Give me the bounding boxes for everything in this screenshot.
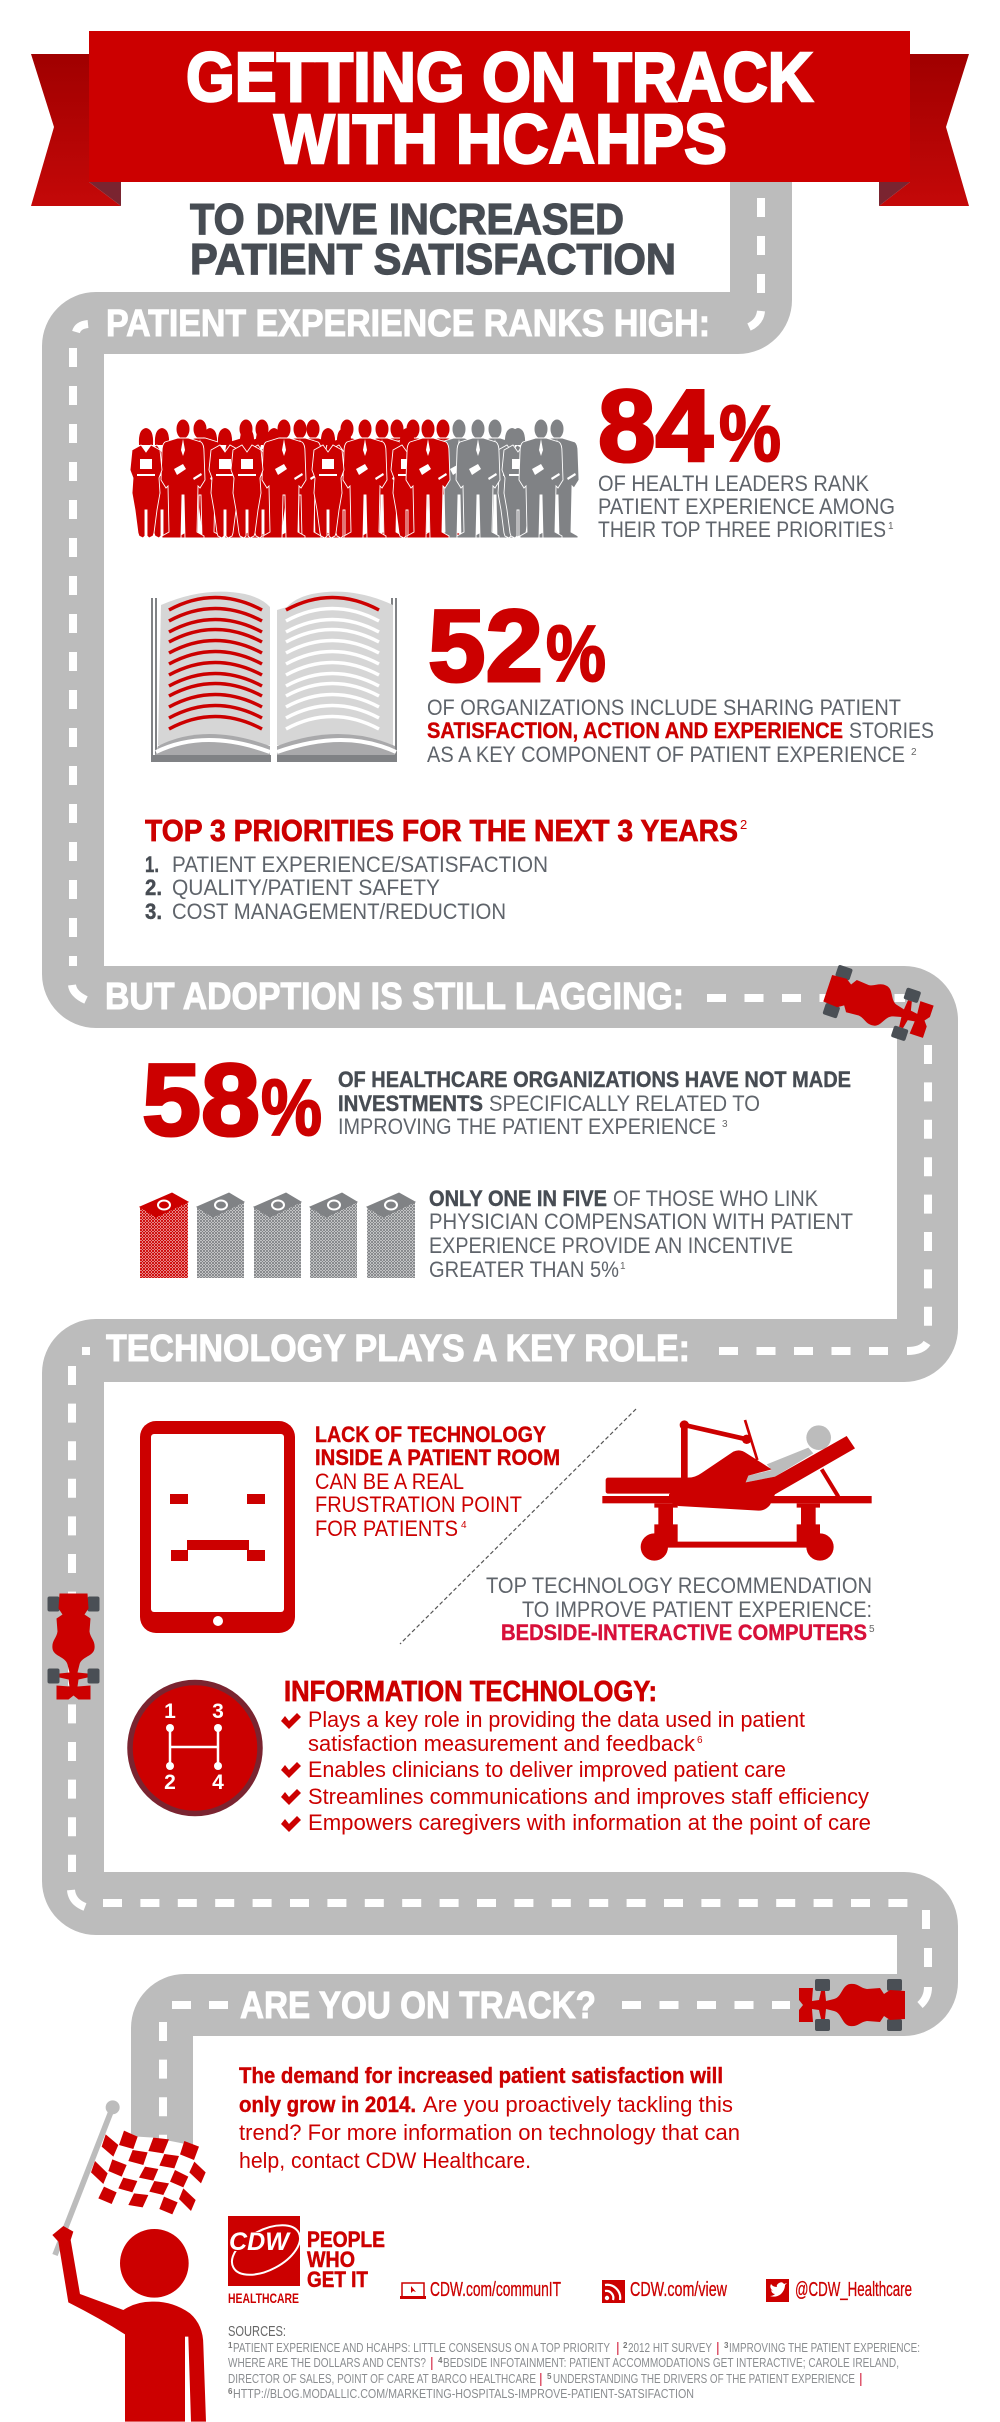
- link: view: [602, 2279, 727, 2303]
- information technology list: Enables clinicians to deliver improved patient care: [308, 1757, 786, 1782]
- call to action text: Are you proactively tackling this: [423, 2092, 733, 2117]
- stat: 52 percent: 2: [911, 747, 917, 758]
- sources: 3: [724, 2341, 729, 2350]
- title banner: WITH HCAHPS: [274, 100, 727, 178]
- stat: 52 percent: OF ORGANIZATIONS INCLUDE SHARING PATIENT: [427, 695, 901, 720]
- icon: patient in hospital bed: [602, 1420, 872, 1561]
- stat: 58 percent: 3: [722, 1119, 728, 1130]
- text: one in five: [429, 1186, 853, 1282]
- top 3 priorities list: 2.: [145, 875, 162, 900]
- text: lack of technology: INSIDE A PATIENT ROOM: [315, 1445, 560, 1470]
- heading: but adoption is still lagging: BUT ADOPTION IS STILL LAGGING:: [105, 976, 684, 1018]
- sources: [228, 2323, 920, 2401]
- information technology list: Streamlines communications and improves staff efficiency: [308, 1784, 869, 1809]
- text: one in five: 1: [620, 1261, 626, 1272]
- link: communIT: CDW.com/communIT: [430, 2279, 561, 2301]
- CDW logo: HEALTHCARE: [228, 2290, 299, 2306]
- sources: 6: [228, 2387, 233, 2396]
- text: one in five: GREATER THAN 5%: [429, 1257, 619, 1282]
- icon: person waving checkered flag: [52, 2100, 206, 2422]
- CDW logo: [224, 2215, 385, 2306]
- text: one in five: EXPERIENCE PROVIDE AN INCENTIVE: [429, 1233, 793, 1258]
- icon: money stacks: [140, 1193, 415, 1278]
- text: lack of technology: 4: [461, 1520, 467, 1531]
- call to action text: trend? For more information on technology that can: [239, 2120, 740, 2145]
- sources: 1: [228, 2341, 233, 2350]
- call to action text: The demand for increased patient satisfaction will: [239, 2063, 723, 2088]
- stat: 58 percent: OF HEALTHCARE ORGANIZATIONS HAVE NOT MADE: [338, 1067, 851, 1092]
- top 3 priorities list: COST MANAGEMENT/REDUCTION: [172, 899, 506, 924]
- stat: 84 percent: 1: [888, 521, 894, 532]
- sources: 2012 HIT SURVEY: [628, 2340, 712, 2355]
- text: top technology recommendation: [486, 1573, 875, 1645]
- text: one in five: ONLY ONE IN FIVE: [429, 1186, 607, 1211]
- text: lack of technology: FOR PATIENTS: [315, 1516, 458, 1541]
- text: top technology recommendation: TOP TECHNOLOGY RECOMMENDATION: [486, 1573, 872, 1598]
- sources: DIRECTOR OF SALES, POINT OF CARE AT BARCO HEALTHCARE: [228, 2371, 536, 2386]
- top 3 priorities list: [145, 813, 747, 924]
- sources: |: [716, 2339, 720, 2355]
- CDW logo: PEOPLE: [307, 2227, 385, 2252]
- road track: [42, 182, 958, 2145]
- text: lack of technology: CAN BE A REAL: [315, 1469, 464, 1494]
- information technology list: [281, 1676, 871, 1835]
- text: top technology recommendation: 5: [869, 1624, 875, 1635]
- stat: 52 percent: AS A KEY COMPONENT OF PATIENT EXPERIENCE: [427, 742, 905, 767]
- stat: 84 percent: THEIR TOP THREE PRIORITIES: [598, 517, 886, 542]
- sources: 2: [623, 2341, 628, 2350]
- call to action text: [239, 2063, 740, 2173]
- text: lack of technology: FRUSTRATION POINT: [315, 1492, 522, 1517]
- icon: race car on bend: [820, 964, 936, 1046]
- call to action text: only grow in 2014.: [239, 2092, 416, 2117]
- icon: gear shift knob: 1: [164, 1700, 176, 1723]
- text: one in five: OF THOSE WHO LINK: [613, 1186, 818, 1211]
- stat: 58 percent: 58: [142, 1043, 260, 1157]
- icon: sad tablet: [140, 1421, 295, 1633]
- stat: 58 percent: IMPROVING THE PATIENT EXPERIENCE: [338, 1114, 716, 1139]
- subtitle: TO DRIVE INCREASED: [190, 195, 624, 244]
- sources: |: [539, 2370, 543, 2386]
- text: top technology recommendation: TO IMPROVE PATIENT EXPERIENCE:: [522, 1597, 872, 1622]
- stat: 52 percent: 52: [428, 589, 543, 703]
- information technology list: INFORMATION TECHNOLOGY:: [284, 1676, 657, 1708]
- icon: gear shift knob: [130, 1682, 260, 1814]
- text: top technology recommendation: BEDSIDE-INTERACTIVE COMPUTERS: [501, 1620, 867, 1645]
- heading: technology plays a key role: TECHNOLOGY PLAYS A KEY ROLE:: [106, 1328, 690, 1370]
- title banner: GETTING ON TRACK: [186, 38, 813, 116]
- top 3 priorities list: 1.: [145, 852, 159, 877]
- top 3 priorities list: 3.: [145, 899, 162, 924]
- information technology list: Empowers caregivers with information at the point of care: [308, 1810, 871, 1835]
- stat: 84 percent: PATIENT EXPERIENCE AMONG: [598, 494, 895, 519]
- call to action text: help, contact CDW Healthcare.: [239, 2148, 531, 2173]
- top 3 priorities list: QUALITY/PATIENT SAFETY: [172, 875, 440, 900]
- heading: patient experience ranks high: PATIENT EXPERIENCE RANKS HIGH:: [106, 303, 710, 345]
- top 3 priorities list: PATIENT EXPERIENCE/SATISFACTION: [172, 852, 548, 877]
- top 3 priorities list: 2: [740, 817, 747, 832]
- subtitle: PATIENT SATISFACTION: [190, 235, 676, 284]
- sources: PATIENT EXPERIENCE AND HCAHPS: LITTLE CONSENSUS ON A TOP PRIORITY: [233, 2340, 610, 2355]
- stat: 58 percent: %: [261, 1063, 322, 1152]
- stat: 84 percent: OF HEALTH LEADERS RANK: [598, 471, 869, 496]
- sources: |: [859, 2370, 863, 2386]
- stat: 52 percent: [427, 589, 934, 767]
- CDW logo: WHO: [307, 2247, 355, 2272]
- sources: 4: [438, 2356, 443, 2365]
- sources: 5: [547, 2372, 552, 2381]
- stat: 52 percent: STORIES: [849, 718, 934, 743]
- top 3 priorities list: TOP 3 PRIORITIES FOR THE NEXT 3 YEARS: [145, 813, 738, 848]
- stat: 58 percent: INVESTMENTS: [338, 1091, 483, 1116]
- title banner: [31, 31, 969, 206]
- text: lack of technology: [315, 1422, 560, 1541]
- icon: open book: [151, 592, 397, 762]
- sources: WHERE ARE THE DOLLARS AND CENTS?: [228, 2355, 426, 2370]
- information technology list: Plays a key role in providing the data used in patient: [308, 1707, 805, 1732]
- sources: SOURCES:: [228, 2323, 286, 2340]
- icon: gear shift knob: 4: [212, 1771, 224, 1794]
- icon: race car on left straight: [48, 1594, 100, 1700]
- sources: |: [430, 2354, 434, 2370]
- stat: 58 percent: [142, 1043, 851, 1157]
- stat: 84 percent: [598, 369, 895, 542]
- text: lack of technology: LACK OF TECHNOLOGY: [315, 1422, 546, 1447]
- link: view: CDW.com/view: [630, 2279, 727, 2301]
- information technology list: satisfaction measurement and feedback: [308, 1731, 696, 1756]
- icon: race car on bottom straight: [799, 1979, 905, 2031]
- stat: 84 percent: %: [719, 389, 781, 478]
- stat: 84 percent: 84: [598, 369, 713, 483]
- link: twitter: @CDW_Healthcare: [795, 2279, 912, 2301]
- stat: 52 percent: SATISFACTION, ACTION AND EXPERIENCE: [427, 718, 843, 743]
- icon: gear shift knob: 3: [212, 1700, 224, 1723]
- icon: crowd of health leaders: [130, 420, 579, 538]
- sources: HTTP://BLOG.MODALLIC.COM/MARKETING-HOSPITALS-IMPROVE-PATIENT-SATSIFACTION: [233, 2386, 694, 2401]
- CDW logo: GET IT: [307, 2267, 368, 2292]
- stat: 52 percent: %: [546, 609, 606, 698]
- sources: IMPROVING THE PATIENT EXPERIENCE:: [729, 2340, 920, 2355]
- heading: are you on track: ARE YOU ON TRACK?: [240, 1985, 596, 2027]
- icon: gear shift knob: 2: [164, 1771, 176, 1794]
- stat: 58 percent: SPECIFICALLY RELATED TO: [489, 1091, 760, 1116]
- link: communIT: [400, 2279, 561, 2301]
- subtitle: [190, 195, 676, 284]
- CDW logo: CDW: [229, 2228, 291, 2256]
- sources: UNDERSTANDING THE DRIVERS OF THE PATIENT EXPERIENCE: [553, 2371, 855, 2386]
- information technology list: 6: [697, 1735, 703, 1746]
- text: one in five: PHYSICIAN COMPENSATION WITH PATIENT: [429, 1209, 853, 1234]
- sources: |: [616, 2339, 620, 2355]
- link: twitter: [766, 2279, 912, 2302]
